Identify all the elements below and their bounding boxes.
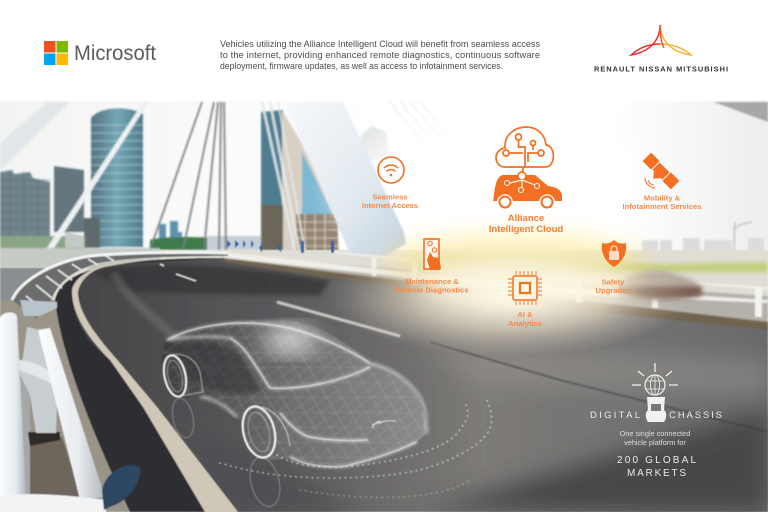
label: Alliance Intelligent Cloud: Alliance bbox=[508, 213, 544, 224]
blurred passing car bbox=[618, 270, 702, 300]
dark shoulder bbox=[55, 258, 235, 512]
label: AI & Analytics: AI & bbox=[517, 310, 533, 319]
icon: safety shield bbox=[602, 240, 626, 267]
icon: wifi bbox=[378, 157, 404, 183]
label: AI & Analytics bbox=[508, 310, 542, 328]
label: Maintenance & Remote Diagnostics: Remote Diagnostics bbox=[395, 286, 469, 294]
icon: globe with rays and car bbox=[632, 363, 678, 422]
icon: cloud and connected car bbox=[493, 127, 562, 208]
wheels bbox=[160, 353, 290, 461]
digital chassis block: CHASSIS bbox=[669, 410, 722, 421]
digital chassis block: One single connected bbox=[620, 429, 690, 438]
road signs bbox=[227, 240, 334, 253]
intro text bbox=[220, 39, 540, 71]
road edge line bbox=[72, 258, 238, 512]
icon: satellite bbox=[639, 153, 679, 193]
bridge pylon bbox=[285, 102, 406, 256]
digital chassis block bbox=[590, 363, 722, 479]
label: AI & Analytics: Analytics bbox=[508, 319, 542, 328]
logo: Microsoft: Microsoft bbox=[74, 42, 156, 65]
intro text: Vehicles utilizing the Alliance Intelligent Cloud will benefit from seamless access bbox=[220, 39, 540, 49]
icon: AI chip bbox=[508, 271, 542, 305]
median curb and right guard rail bbox=[222, 252, 768, 330]
lane dashes bbox=[277, 302, 400, 336]
sky bbox=[0, 101, 768, 291]
label: Seamless Internet Access: Internet Access bbox=[362, 201, 418, 210]
label: Seamless Internet Access: Seamless bbox=[372, 192, 408, 202]
curved barrier bbox=[12, 252, 228, 318]
label: Maintenance & Remote Diagnostics bbox=[395, 277, 469, 294]
bridge cables bbox=[150, 102, 226, 250]
logo: Microsoft bbox=[44, 41, 156, 65]
icon: maintenance tablet and hand bbox=[424, 239, 441, 270]
label: Mobility & Infotainment Services: Mobility & bbox=[644, 194, 681, 202]
label: Safety Upgrades bbox=[595, 278, 631, 295]
gravel strip bbox=[0, 300, 130, 512]
digital chassis block: 200 GLOBAL bbox=[617, 455, 696, 466]
posts bbox=[20, 327, 58, 433]
label: Safety Upgrades: Safety bbox=[602, 278, 625, 286]
road seam bbox=[430, 342, 768, 432]
skyline buildings bbox=[0, 108, 768, 275]
label: Seamless Internet Access bbox=[362, 192, 418, 210]
left guard rail bbox=[0, 252, 228, 512]
label: Mobility & Infotainment Services bbox=[623, 194, 701, 211]
label: Safety Upgrades: Upgrades bbox=[595, 286, 631, 295]
pipes bbox=[0, 312, 26, 497]
road surface bbox=[55, 258, 768, 512]
digital chassis block: MARKETS bbox=[627, 468, 686, 479]
right carriageway lane bbox=[230, 256, 768, 326]
right skyline bbox=[642, 238, 764, 262]
logo: Renault Nissan Mitsubishi bbox=[594, 25, 728, 74]
road shading bbox=[90, 265, 330, 296]
intro text: deployment, firmware updates, as well as access to infotainment services. bbox=[220, 61, 503, 71]
digital chassis block: DIGITAL bbox=[590, 410, 640, 421]
label: Alliance Intelligent Cloud: Intelligent Cloud bbox=[489, 224, 563, 235]
distant trees bbox=[410, 252, 768, 274]
label: Mobility & Infotainment Services: Infotainment Services bbox=[623, 202, 701, 211]
header band bbox=[0, 0, 768, 102]
intro text: to the internet, providing enhanced remote diagnostics, continuous software bbox=[220, 50, 540, 60]
label: Alliance Intelligent Cloud bbox=[489, 213, 563, 235]
wireframe car bbox=[160, 320, 492, 510]
sky glare bbox=[310, 95, 690, 285]
sun glare bbox=[385, 234, 645, 290]
far pavement bbox=[0, 250, 768, 340]
central towers bbox=[261, 110, 283, 256]
left bridge struts bbox=[0, 102, 70, 170]
logo: Renault Nissan Mitsubishi: RENAULT NISSAN MITSUBISHI bbox=[594, 64, 728, 74]
label: Maintenance & Remote Diagnostics: Maintenance & bbox=[405, 277, 459, 286]
digital chassis block: vehicle platform for bbox=[624, 438, 686, 447]
